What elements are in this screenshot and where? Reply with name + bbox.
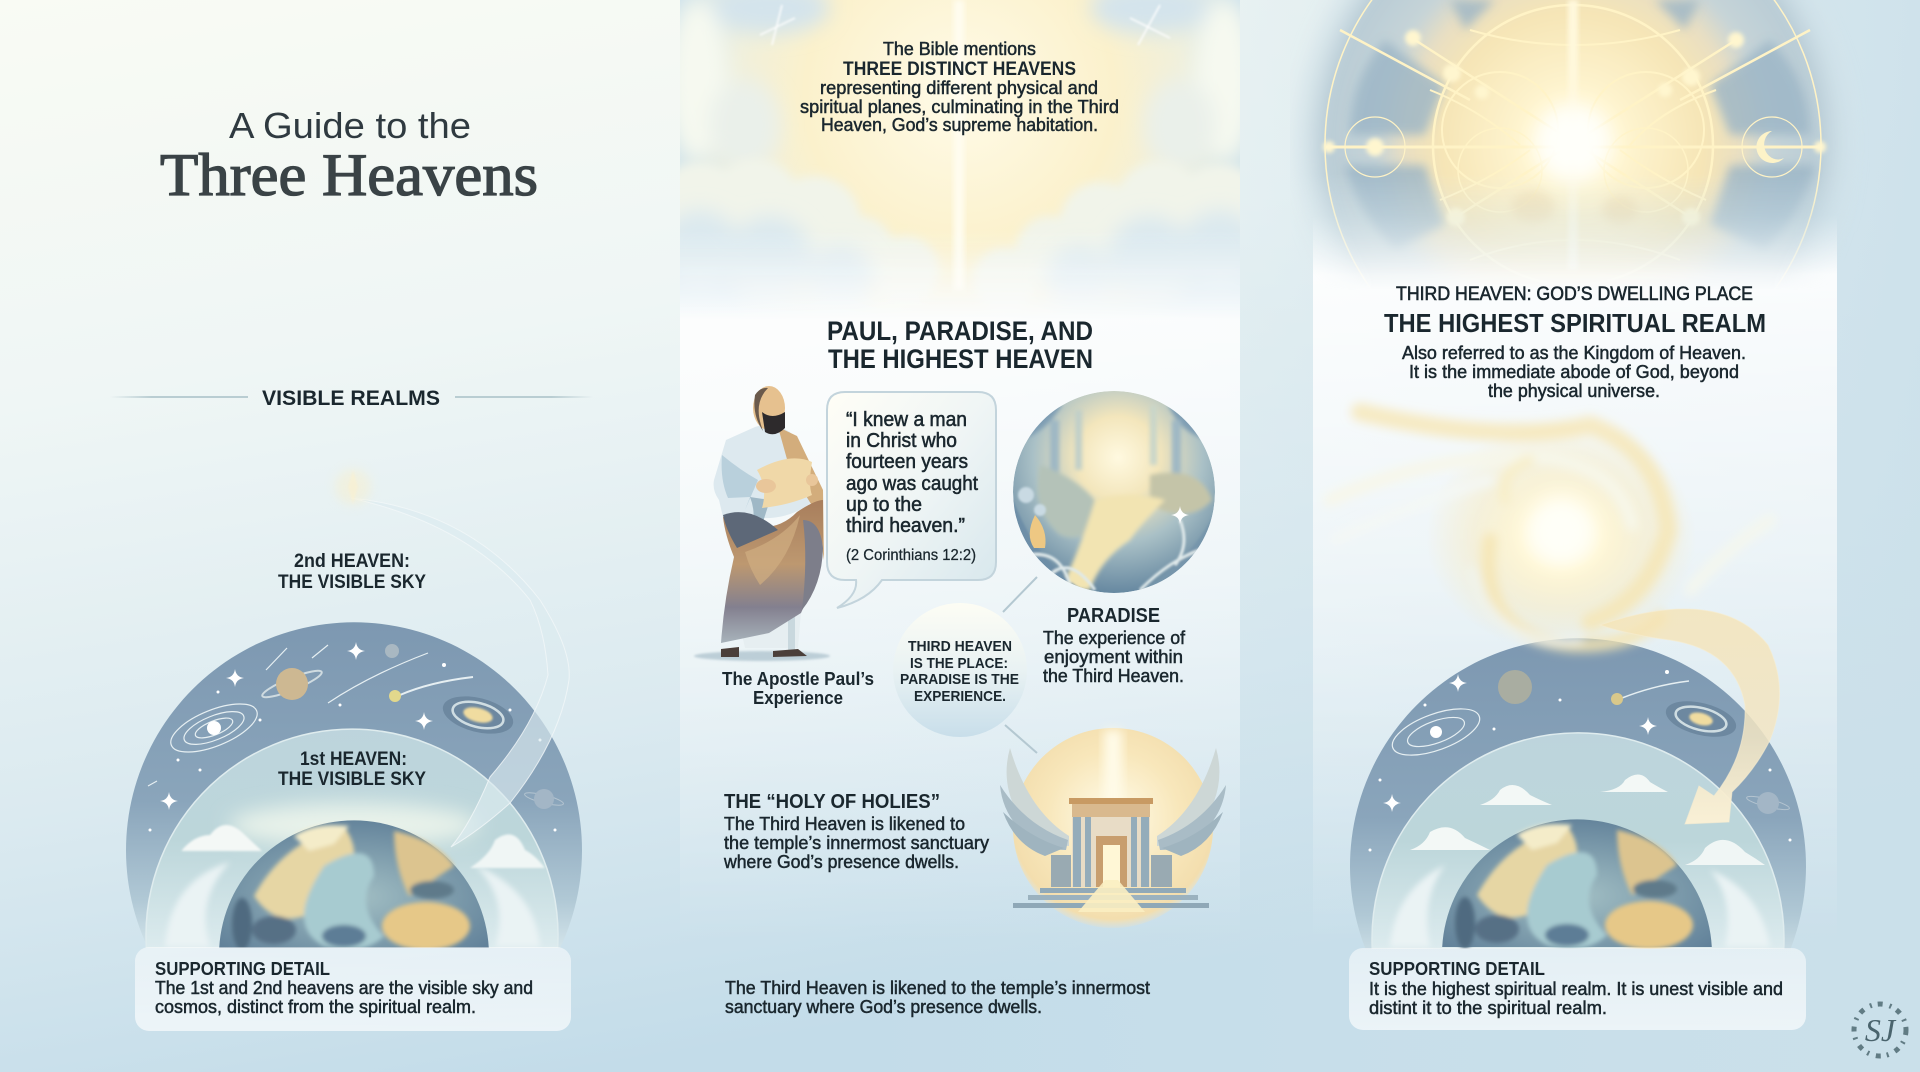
callout: left supporting detail: The 1st and 2nd heavens are the visible sky and (155, 978, 533, 998)
illustration: Apostle Paul (694, 386, 830, 661)
speech bubble: quote: fourteen years (846, 451, 968, 473)
atmosphere (1372, 733, 1784, 948)
illustration: golden sky and clouds (680, 0, 1240, 306)
callout: left supporting detail: SUPPORTING DETAIL (155, 959, 330, 979)
label: paradise: PARADISE (1067, 605, 1160, 627)
title: Three Heavens (160, 142, 538, 208)
illustration: golden swirl (1330, 412, 1770, 652)
first heaven atmosphere (146, 729, 558, 948)
speech bubble: quote: (2 Corinthians 12:2) (846, 547, 976, 564)
section heading: visible realms: VISIBLE REALMS (262, 387, 440, 410)
panel: right column (1313, 215, 1837, 1072)
label: paradise (1043, 605, 1186, 686)
arrow: divine descent (1600, 609, 1780, 824)
arc ribbon arrow (351, 498, 569, 847)
callout: right supporting detail (1349, 948, 1806, 1030)
connector line: paradise (1003, 577, 1037, 612)
speech bubble: quote: third heaven.” (846, 515, 965, 537)
callout: place and experience: EXPERIENCE. (914, 688, 1006, 705)
label: Apostle Paul: The Apostle Paul’s (722, 669, 874, 689)
text: centre footer (725, 978, 1150, 1017)
callout: right supporting detail: It is the highest spiritual realm. It is unest visible and (1369, 979, 1783, 999)
speech bubble: quote (827, 392, 996, 608)
callout: place and experience: IS THE PLACE: (910, 655, 1008, 672)
text: centre footer: sanctuary where God’s presence dwells. (725, 997, 1042, 1017)
text: holy of holies: THE “HOLY OF HOLIES” (724, 791, 940, 813)
text: introduction: spiritual planes, culminating in the Third (800, 97, 1119, 117)
title: A Guide to the (229, 105, 471, 146)
illustration: right dome of sky and earth (1350, 638, 1806, 964)
label: first heaven: 1st HEAVEN: (300, 749, 407, 770)
text: introduction: THREE DISTINCT HEAVENS (843, 59, 1076, 80)
label: second heaven (278, 551, 426, 593)
callout: place and experience (893, 603, 1027, 737)
text: holy of holies: The Third Heaven is likened to (724, 814, 965, 834)
title (160, 105, 538, 208)
text: holy of holies: where God’s presence dwells. (723, 852, 959, 872)
panel: centre column (680, 210, 1240, 1072)
heading: Paul, Paradise: PAUL, PARADISE, AND (827, 316, 1093, 346)
speech bubble: quote: ago was caught (846, 473, 978, 495)
text: introduction: Heaven, God’s supreme habitation. (821, 115, 1098, 135)
earth (1442, 819, 1712, 949)
callout: right supporting detail: distint it to the spiritual realm. (1369, 998, 1607, 1018)
speech bubble: quote: “I knew a man (846, 409, 967, 431)
illustration: temple holy of holies (1000, 728, 1226, 928)
label: Apostle Paul: Experience (753, 688, 843, 708)
text: third heaven heading: THE HIGHEST SPIRITUAL REALM (1384, 308, 1766, 338)
label: paradise: enjoyment within (1044, 647, 1183, 667)
callout: place and experience: THIRD HEAVEN (908, 638, 1012, 655)
speech bubble: quote: up to the (846, 494, 922, 516)
connector line: temple (1005, 725, 1037, 753)
illustration: paradise garden (1012, 391, 1216, 597)
callout: left supporting detail (135, 947, 571, 1031)
label: first heaven (278, 749, 426, 790)
text: introduction (800, 39, 1119, 135)
heading: Paul, Paradise (827, 316, 1093, 374)
label: second heaven: THE VISIBLE SKY (278, 572, 426, 593)
earth (219, 820, 489, 950)
icon: SJ monogram logo: SJ (1865, 1012, 1897, 1048)
text: third heaven heading: It is the immediate abode of God, beyond (1409, 362, 1739, 382)
text: third heaven heading: the physical universe. (1488, 381, 1660, 401)
illustration: left dome of sky and earth (126, 498, 582, 950)
label: first heaven: THE VISIBLE SKY (278, 769, 426, 790)
second heaven cosmos (126, 622, 582, 948)
heading: Paul, Paradise: THE HIGHEST HEAVEN (828, 344, 1093, 374)
callout: left supporting detail: cosmos, distinct from the spiritual realm. (155, 997, 476, 1017)
text: third heaven heading: THIRD HEAVEN: GOD’S DWELLING PLACE (1396, 284, 1753, 305)
callout: place and experience: PARADISE IS THE (900, 671, 1019, 688)
text: holy of holies (723, 791, 989, 872)
text: third heaven heading (1384, 284, 1766, 401)
text: introduction: representing different physical and (820, 78, 1098, 98)
label: Apostle Paul (722, 669, 874, 708)
text: centre footer: The Third Heaven is likened to the temple’s innermost (725, 978, 1150, 998)
icon: small star glow (335, 469, 371, 505)
callout: right supporting detail: SUPPORTING DETAIL (1369, 959, 1545, 979)
icon: SJ monogram logo (1854, 1004, 1906, 1056)
text: holy of holies: the temple’s innermost sanctuary (724, 833, 989, 853)
illustration: celestial mandala (1298, 0, 1837, 276)
cosmos (1350, 638, 1806, 964)
label: paradise: The experience of (1043, 628, 1186, 648)
speech bubble: quote: in Christ who (846, 430, 957, 452)
label: paradise: the Third Heaven. (1043, 666, 1184, 686)
text: introduction: The Bible mentions (883, 39, 1036, 59)
text: third heaven heading: Also referred to as the Kingdom of Heaven. (1402, 343, 1746, 363)
label: second heaven: 2nd HEAVEN: (294, 551, 410, 572)
